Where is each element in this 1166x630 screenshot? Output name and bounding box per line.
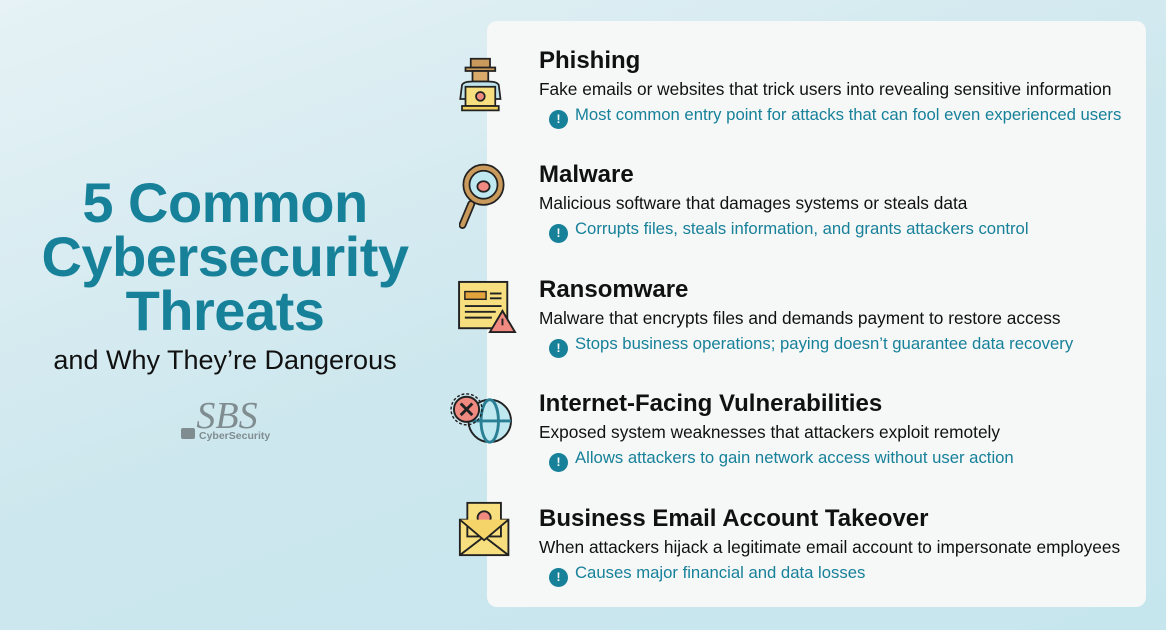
row: BEC: Business Email Account Takeover bbox=[539, 505, 928, 532]
row: BEC: ! bbox=[556, 570, 560, 584]
row: ransomware: Malware that encrypts files and demands payment to restore access bbox=[539, 308, 1061, 328]
row: internet-facing: Internet-Facing Vulnerabilities bbox=[539, 390, 882, 417]
row: internet-facing: ! bbox=[556, 455, 560, 469]
panel: threats bbox=[487, 21, 1146, 607]
icon: magnifier bug bbox=[459, 164, 504, 229]
row: malware: Malware bbox=[539, 161, 634, 188]
row: internet-facing: Exposed system weaknesses that attackers exploit remotely bbox=[539, 422, 1000, 442]
row: BEC bbox=[458, 502, 1120, 587]
row: phishing bbox=[459, 47, 1121, 129]
title: 5 Common bbox=[82, 171, 368, 234]
title: Threats bbox=[126, 279, 324, 342]
row: malware bbox=[459, 161, 1029, 243]
row: phishing: ! bbox=[556, 112, 560, 126]
row: ransomware: Stops business operations; paying doesn’t guarantee data recovery bbox=[575, 334, 1073, 353]
logo bbox=[181, 398, 270, 442]
row: ransomware: ! bbox=[556, 341, 560, 355]
row: phishing: Fake emails or websites that trick users into revealing sensitive information bbox=[539, 79, 1111, 99]
row: ransomware bbox=[458, 276, 1074, 358]
logo: CyberSecurity bbox=[199, 430, 270, 442]
title: Cybersecurity bbox=[41, 225, 408, 288]
row: phishing: Phishing bbox=[539, 47, 640, 74]
title bbox=[41, 171, 409, 342]
row: phishing: Most common entry point for attacks that can fool even experienced users bbox=[575, 105, 1121, 124]
row: ransomware: Ransomware bbox=[539, 276, 688, 303]
row: BEC: Causes major financial and data losses bbox=[575, 563, 865, 582]
row: BEC: When attackers hijack a legitimate email account to impersonate employees bbox=[539, 537, 1120, 557]
icon: envelope skull bbox=[458, 502, 510, 556]
subtitle: and Why They’re Dangerous bbox=[53, 345, 397, 375]
row: malware: Corrupts files, steals information, and grants attackers control bbox=[575, 219, 1029, 238]
icon: hacker bbox=[459, 58, 502, 112]
row: internet-facing bbox=[450, 390, 1014, 472]
row: internet-facing: Allows attackers to gain network access without user action bbox=[575, 448, 1014, 467]
row: malware: ! bbox=[556, 226, 560, 240]
icon: globe x bbox=[450, 393, 512, 444]
row: malware: Malicious software that damages systems or steals data bbox=[539, 193, 967, 213]
icon: document warning bbox=[458, 280, 517, 333]
